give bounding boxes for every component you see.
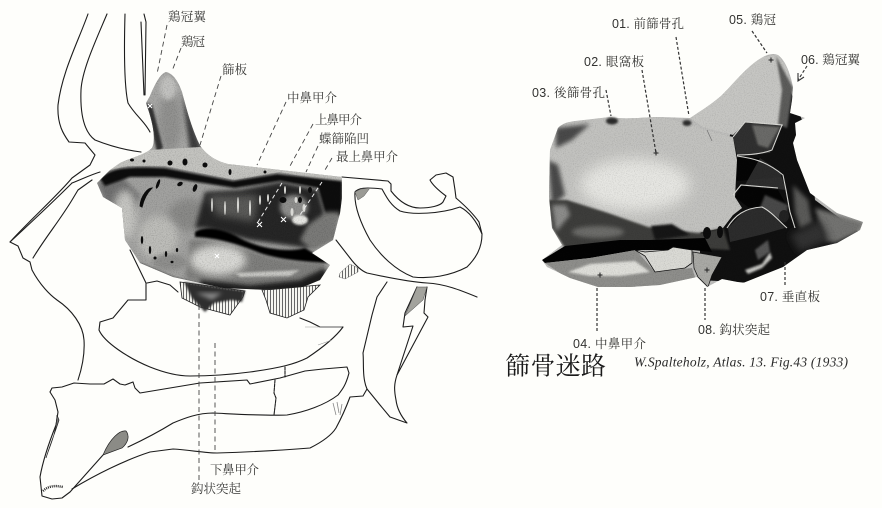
right grey lobe xyxy=(300,212,340,250)
labels, right xyxy=(532,13,860,351)
dark mid band xyxy=(548,200,730,250)
crista galli surface xyxy=(690,55,788,135)
uncinate process fragment xyxy=(180,282,245,315)
sphenoid and sinus outlines xyxy=(336,173,482,297)
pale flecks xyxy=(211,186,306,216)
speckled light patch xyxy=(280,195,308,219)
ethmoid bone, lateral view xyxy=(95,70,345,295)
marker crosses xyxy=(148,104,286,258)
crista galli shading xyxy=(146,72,196,150)
grain texture xyxy=(540,50,865,290)
labels, left: 鶏冠翼 xyxy=(168,10,206,24)
dashed leader lines, left xyxy=(157,25,332,480)
labels, right: 06. 鶏冠翼 xyxy=(801,53,860,67)
pits and foramina speckles xyxy=(130,158,312,263)
left panel: sagittal skull line drawing xyxy=(10,10,482,499)
foramen marks xyxy=(606,118,618,124)
dark wedge, mid-right xyxy=(195,182,335,248)
labels, right: 05. 鶏冠 xyxy=(729,13,776,27)
labels, left: 上鼻甲介 xyxy=(315,112,362,127)
perpendicular plate dark mass xyxy=(700,90,870,285)
labels, left: 鶏冠 xyxy=(181,35,205,49)
ethmoid air cell lamellae xyxy=(733,122,782,155)
pale uncinate plate xyxy=(635,247,692,272)
orbital plate xyxy=(548,117,742,233)
labels, right: 04. 中鼻甲介 xyxy=(573,336,646,351)
labels, right: 02. 眼窩板 xyxy=(584,54,644,69)
right panel: ethmoid labyrinth bone xyxy=(532,13,870,351)
left grey zone xyxy=(97,175,140,240)
labels, left xyxy=(168,10,398,496)
bone silhouette and shading xyxy=(540,50,870,290)
nose and facial outlines xyxy=(10,14,150,380)
grain texture xyxy=(95,70,345,295)
title: 篩骨迷路 xyxy=(505,352,606,380)
labels, right: 01. 前篩骨孔 xyxy=(612,16,684,31)
labels, left: 中鼻甲介 xyxy=(287,90,337,105)
inferior turbinate line drawing xyxy=(40,282,387,499)
speckled lower lamella xyxy=(745,252,772,274)
black lower band xyxy=(195,228,330,263)
labels, left: 篩板 xyxy=(222,62,247,77)
bottom shadow xyxy=(197,266,328,290)
posterior pterygoid line drawing xyxy=(367,287,428,423)
dashed leader lines, right xyxy=(597,31,785,332)
labels, left: 最上鼻甲介 xyxy=(336,149,398,164)
black top band xyxy=(100,167,342,216)
cribriform strip xyxy=(110,147,342,184)
maxilla line drawing xyxy=(99,250,343,376)
lower light ridge xyxy=(185,240,325,288)
citation: W.Spalteholz, Atlas. 13. Fig.43 (1933) xyxy=(634,354,848,370)
labels, right: 07. 垂直板 xyxy=(760,289,820,304)
middle turbinate strip xyxy=(545,250,696,290)
arrow: 06 pointer xyxy=(798,66,807,81)
labels, left: 鈎状突起 xyxy=(191,481,241,496)
labels, left: 蝶篩陥凹 xyxy=(319,131,369,146)
labels, left: 下鼻甲介 xyxy=(210,462,259,477)
hatched section below turbinate xyxy=(262,285,320,318)
black cleft xyxy=(542,238,712,263)
hatched sinus fragment xyxy=(339,264,358,279)
labels, right: 08. 鈎状突起 xyxy=(698,322,770,337)
labels, right: 03. 後篩骨孔 xyxy=(532,85,605,100)
